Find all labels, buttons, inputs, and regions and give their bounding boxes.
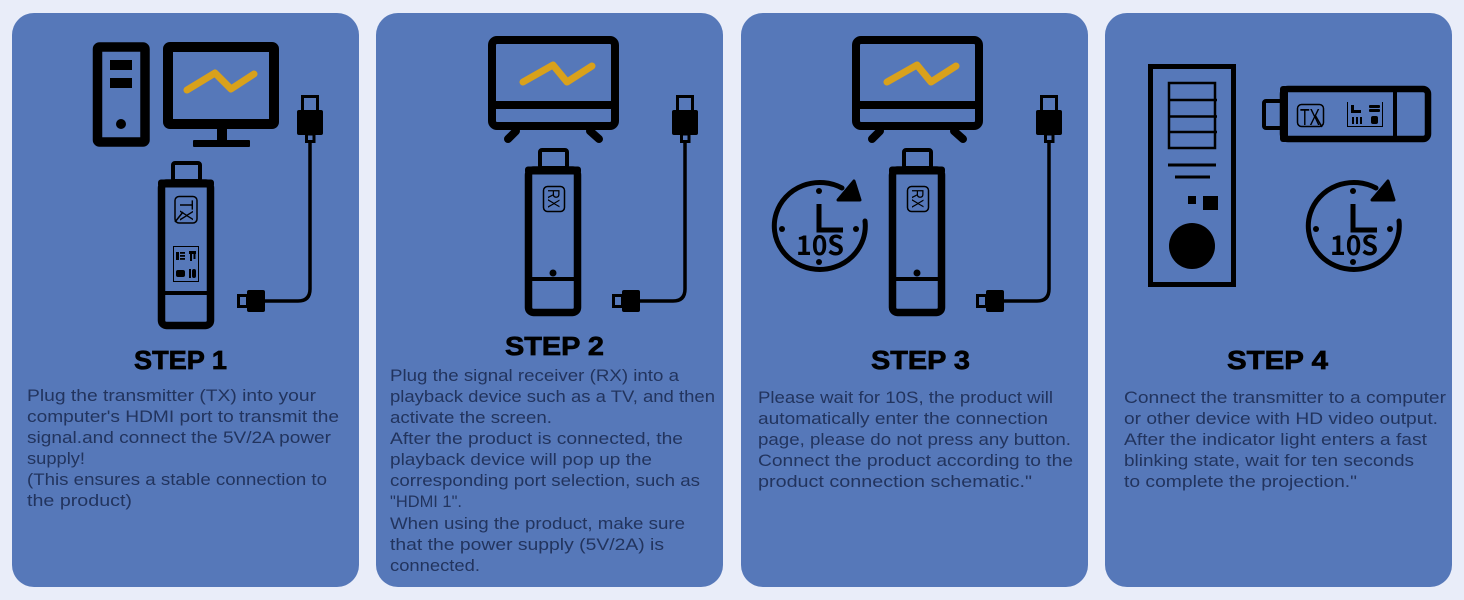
icon: RX dongle: [889, 150, 945, 312]
text: step 2 description: playback device such as a TV, and then: [390, 388, 715, 406]
text: step 3 description: product connection schematic.": [758, 473, 1032, 491]
heading: step 1: STEP 1: [134, 345, 227, 375]
heading: step 4: STEP 4: [1227, 345, 1329, 375]
text: step 4 description: blinking state, wait for ten seconds: [1124, 452, 1414, 470]
text: step 2 description: Plug the signal receiver (RX) into a: [390, 367, 680, 385]
text: step 3 description: page, please do not press any button.: [758, 431, 1071, 449]
text: step 3 description: Connect the product according to the: [758, 452, 1073, 470]
text: step 1 description: signal.and connect the 5V/2A power: [27, 429, 332, 447]
text: step 2 description: playback device will pop up the: [390, 451, 652, 469]
heading: step 2: STEP 2: [505, 331, 604, 361]
text: step 4 description: Connect the transmitter to a computer: [1124, 389, 1447, 407]
panel: step 3: [741, 13, 1088, 587]
icon: TV: [856, 40, 979, 139]
text: step 1 description: supply!: [27, 450, 85, 468]
text: step 1 description: [27, 387, 339, 510]
icon: RX dongle: RX: [908, 189, 927, 208]
icon: 10 second clock: 10S: [1330, 224, 1378, 263]
text: step 3 description: [758, 389, 1073, 491]
panel: step 4: [1105, 13, 1452, 587]
icon: tall computer tower: [1150, 66, 1234, 284]
text: step 2 description: that the power supply (5V/2A) is: [390, 536, 664, 554]
icon: TX dongle: [158, 163, 214, 326]
icon: TX dongle horizontal: TX: [1300, 104, 1320, 130]
icon: RX dongle: [525, 150, 581, 312]
icon: power cable: [614, 96, 698, 312]
text: step 1 description: (This ensures a stable connection to: [27, 471, 327, 489]
text: step 2 description: When using the product, make sure: [390, 515, 685, 533]
icon: TV: [492, 40, 615, 139]
icon: TX dongle: TX: [176, 200, 196, 221]
text: step 4 description: or other device with HD video output.: [1124, 410, 1438, 428]
icon: 10 second clock: [1308, 181, 1399, 269]
icon: 10 second clock: 10S: [796, 224, 844, 263]
text: step 2 description: connected.: [390, 557, 480, 575]
text: step 2 description: [390, 367, 715, 575]
panel: step 2: [376, 13, 723, 587]
text: step 3 description: automatically enter the connection: [758, 410, 1048, 428]
text: step 1 description: the product): [27, 492, 132, 510]
icon: TX dongle horizontal: [1264, 86, 1428, 142]
icon: monitor: [168, 47, 274, 147]
panel: step 1: [12, 13, 359, 587]
icon: power cable: [238, 96, 323, 312]
text: step 2 description: corresponding port selection, such as: [390, 472, 700, 490]
heading: step 3: STEP 3: [871, 345, 970, 375]
text: step 1 description: Plug the transmitter (TX) into your: [27, 387, 317, 405]
text: step 2 description: activate the screen.: [390, 409, 552, 427]
icon: 10 second clock: [774, 181, 865, 269]
text: step 4 description: [1124, 389, 1447, 491]
text: step 4 description: to complete the projection.": [1124, 473, 1357, 491]
text: step 3 description: Please wait for 10S, the product will: [758, 389, 1053, 407]
text: step 2 description: After the product is connected, the: [390, 430, 683, 448]
icon: power cable: [978, 96, 1062, 312]
icon: RX dongle: RX: [544, 189, 563, 208]
text: step 1 description: computer's HDMI port to transmit the: [27, 408, 339, 426]
icon: computer tower: [98, 47, 145, 142]
text: step 2 description: "HDMI 1".: [390, 493, 462, 511]
text: step 4 description: After the indicator light enters a fast: [1124, 431, 1427, 449]
